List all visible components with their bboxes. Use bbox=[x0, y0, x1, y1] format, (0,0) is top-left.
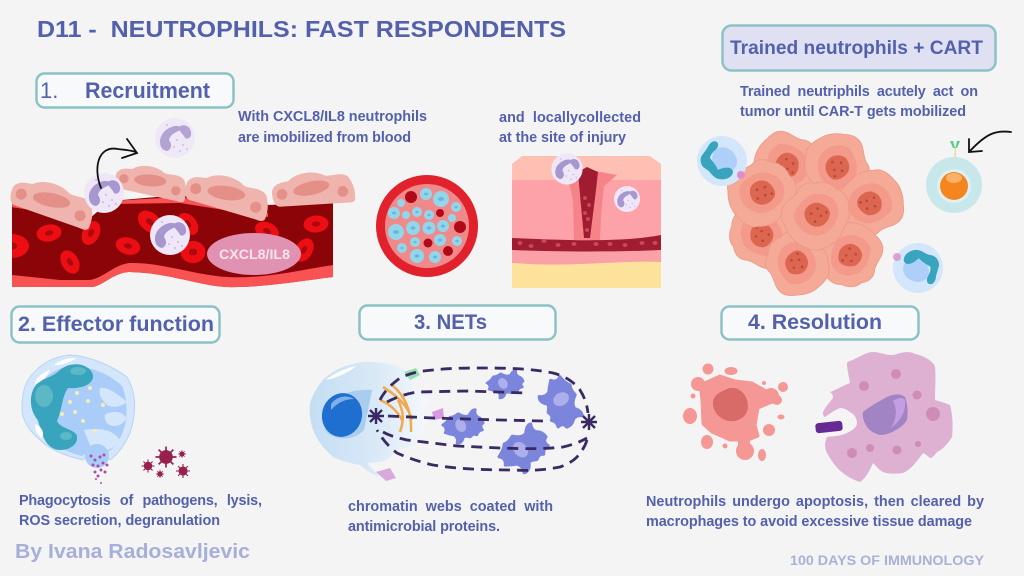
heading: recruitment: Recruitment bbox=[85, 78, 211, 103]
illustration: skin injury bbox=[512, 153, 661, 288]
text: trained neutrophils act: tumor until CAR-T gets mobilized bbox=[740, 104, 966, 120]
neutrophil in tissue bbox=[614, 186, 640, 212]
arrow: to CAR-T bbox=[969, 132, 1011, 152]
anchor knots bbox=[368, 408, 597, 430]
text: immobilized from blood: are imobilized from blood bbox=[238, 130, 411, 146]
text: resolution description: macrophages to avoid excessive tissue damage bbox=[646, 514, 972, 530]
text: immobilized from blood: With CXCL8/IL8 neutrophils bbox=[238, 109, 427, 125]
text: resolution description bbox=[646, 494, 984, 530]
illustration: neutrophil extracellular trap bbox=[310, 362, 597, 481]
text: effector function: Phagocytosis of pathogens, lysis, bbox=[19, 493, 262, 509]
text: resolution description: Neutrophils undergo apoptosis, then cleared by bbox=[646, 494, 984, 510]
text: NETs description: antimicrobial proteins. bbox=[348, 519, 500, 535]
chemokine label bbox=[207, 233, 301, 275]
neutrophil in lumen bbox=[150, 215, 190, 255]
heading: resolution: 4. Resolution bbox=[748, 311, 882, 334]
text: NETs description bbox=[348, 499, 553, 535]
heading: NETs bbox=[360, 306, 556, 340]
text: effector function bbox=[19, 493, 262, 529]
heading: NETs: 3. NETs bbox=[414, 311, 487, 334]
text: effector function: ROS secretion, degranulation bbox=[19, 513, 220, 529]
icon: CAR-T cell bbox=[926, 141, 982, 213]
illustration: apoptotic neutrophil bbox=[683, 364, 788, 461]
chemokine label: CXCL8/IL8 bbox=[219, 247, 291, 262]
heading: trained neutrophils + CART: Trained neutrophils + CART bbox=[730, 38, 983, 59]
text: collected at injury: and locallycollected bbox=[499, 110, 641, 126]
heading: recruitment: 1. bbox=[40, 78, 58, 103]
text: immobilized from blood bbox=[238, 109, 427, 146]
icon: neutrophil bottom-right of tumor bbox=[886, 236, 950, 300]
heading: resolution bbox=[722, 306, 918, 340]
heading: recruitment bbox=[36, 74, 234, 108]
icon: pathogens bbox=[142, 446, 190, 478]
text: trained neutrophils act: Trained neutriphils acutely act on bbox=[740, 84, 978, 100]
illustration: vessel cross-section bbox=[376, 175, 478, 277]
heading: trained neutrophils + CART bbox=[722, 26, 996, 70]
bacteria bbox=[487, 370, 523, 398]
series label: 100 DAYS OF IMMUNOLOGY bbox=[790, 553, 984, 568]
endothelial cells bbox=[7, 164, 357, 231]
text: NETs description: chromatin webs coated with bbox=[348, 499, 553, 515]
title: D11 - NEUTROPHILS: FAST RESPONDENTS bbox=[37, 16, 566, 42]
illustration: blood vessel with endothelium bbox=[7, 118, 357, 287]
heading: effector function: 2. Effector function bbox=[18, 313, 214, 336]
illustration: macrophage engulfing debris bbox=[815, 352, 953, 482]
text: collected at injury: at the site of injury bbox=[499, 130, 626, 146]
neutrophil outside vessel bbox=[155, 118, 195, 158]
heading: effector function bbox=[12, 306, 220, 342]
neutrophil at wound bbox=[551, 153, 583, 185]
text: trained neutrophils act bbox=[740, 84, 978, 120]
granule protein marks bbox=[404, 368, 420, 380]
dashed DNA webs bbox=[377, 368, 588, 470]
icon: neutrophil top-left of tumor bbox=[697, 136, 747, 186]
text: collected at injury bbox=[499, 110, 641, 146]
neutrophil crossing wall bbox=[84, 173, 124, 213]
arrow: extravasation bbox=[97, 139, 137, 188]
illustration: tumor cluster bbox=[717, 125, 914, 306]
chromatin fibres bbox=[380, 385, 412, 432]
author credit: By Ivana Radosavljevic bbox=[15, 540, 250, 563]
illustration: phagocytosing neutrophil bbox=[22, 355, 135, 484]
red blood cells bbox=[12, 206, 329, 277]
